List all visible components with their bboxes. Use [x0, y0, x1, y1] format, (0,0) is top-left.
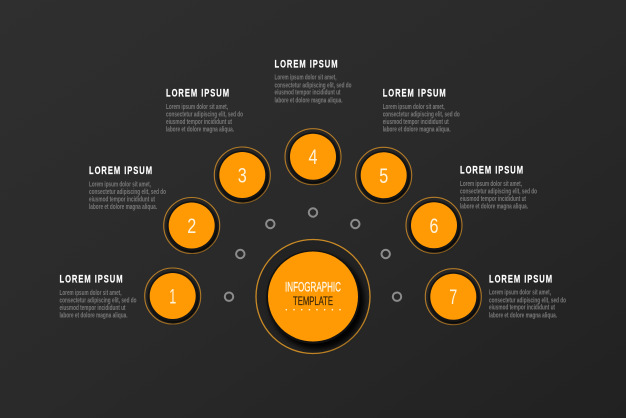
text block 5: eiusmod tempor incididunt ut: [383, 117, 449, 126]
text block 1: [60, 273, 137, 320]
text block 4: Lorem ipsum dolor sit amet,: [274, 73, 337, 82]
text block 7: [489, 273, 566, 319]
text block 2: LOREM IPSUM: [89, 165, 152, 176]
text block 7: eiusmod tempor incididunt ut: [489, 303, 555, 312]
text block 4: [274, 58, 352, 104]
step 6 circle: [406, 197, 462, 253]
text block 6: [460, 164, 537, 211]
text block 5: consectetur adipiscing elit, sed do: [383, 110, 460, 119]
text block 7: Lorem ipsum dolor sit amet,: [489, 288, 551, 297]
step 5 circle: 5: [379, 165, 388, 188]
text block 6: LOREM IPSUM: [460, 164, 523, 176]
text block 1: LOREM IPSUM: [60, 273, 123, 285]
step 3 circle: [214, 147, 270, 203]
step 7 circle: 7: [449, 286, 457, 309]
text block 6: consectetur adipiscing elit, sed do: [460, 187, 537, 196]
text block 1: labore et dolore magna aliqua.: [60, 310, 128, 320]
text block 5: Lorem ipsum dolor sit amet,: [383, 102, 445, 111]
text block 4: LOREM IPSUM: [274, 58, 338, 70]
text block 6: Lorem ipsum dolor sit amet,: [460, 179, 522, 188]
text block 5: labore et dolore magna aliqua.: [383, 125, 451, 134]
text block 7: consectetur adipiscing elit, sed do: [489, 295, 566, 304]
step 2 circle: 2: [187, 215, 196, 238]
text block 3: Lorem ipsum dolor sit amet,: [166, 102, 228, 111]
text block 2: Lorem ipsum dolor sit amet,: [89, 179, 151, 188]
text block 3: consectetur adipiscing elit, sed do: [166, 110, 243, 119]
text block 3: labore et dolore magna aliqua.: [166, 125, 234, 134]
center subtitle: TEMPLATE: [293, 294, 333, 308]
step 4 circle: [285, 129, 341, 185]
text block 4: eiusmod tempor incididunt ut: [274, 88, 341, 97]
step 3 circle: 3: [238, 164, 247, 188]
step 7 circle: [425, 269, 481, 325]
text block 1: eiusmod tempor incididunt ut: [60, 303, 126, 312]
text block 5: [383, 87, 460, 134]
text block 4: consectetur adipiscing elit, sed do: [274, 80, 352, 89]
text block 6: labore et dolore magna aliqua.: [460, 202, 528, 211]
text block 1: consectetur adipiscing elit, sed do: [60, 296, 137, 304]
step 6 circle: 6: [430, 215, 438, 238]
text block 5: LOREM IPSUM: [383, 87, 446, 99]
text block 6: eiusmod tempor incididunt ut: [460, 194, 526, 203]
text block 7: labore et dolore magna aliqua.: [489, 310, 557, 319]
step 1 circle: [145, 268, 201, 324]
step 4 circle: 4: [308, 146, 318, 169]
text block 3: [166, 87, 243, 134]
text block 4: labore et dolore magna aliqua.: [274, 95, 342, 104]
text block 2: [89, 165, 166, 211]
text block 3: LOREM IPSUM: [166, 87, 229, 99]
step 1 circle: 1: [169, 286, 176, 308]
center title: INFOGRAPHIC: [285, 280, 341, 295]
center dotted line: [286, 309, 341, 311]
connector dots: [225, 208, 401, 301]
step 2 circle: [164, 198, 220, 254]
text block 1: Lorem ipsum dolor sit amet,: [60, 288, 122, 297]
text block 7: LOREM IPSUM: [489, 273, 552, 285]
text block 3: eiusmod tempor incididunt ut: [166, 117, 232, 126]
step 5 circle: [356, 147, 412, 203]
text block 2: labore et dolore magna aliqua.: [89, 202, 157, 211]
text block 2: eiusmod tempor incididunt ut: [89, 194, 155, 203]
text block 2: consectetur adipiscing elit, sed do: [89, 187, 166, 196]
central circle: [256, 240, 370, 354]
